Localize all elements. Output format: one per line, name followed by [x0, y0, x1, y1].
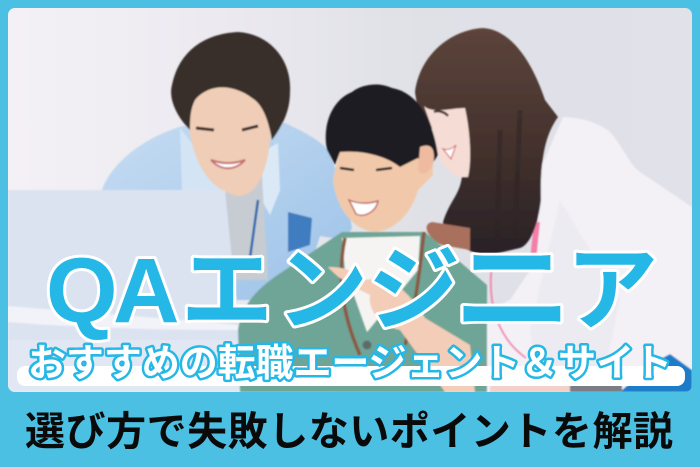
person: man on the left in a blue shirt	[102, 32, 352, 300]
heading: QAエンジニア: ア	[566, 240, 658, 342]
laptop	[8, 190, 240, 392]
white strip behind subtitle	[17, 366, 685, 386]
bottom caption: 選び方で失敗しないポイントを解説: 選び方で失敗しないポイントを解説	[25, 410, 673, 454]
person: woman on the right in a white blouse	[415, 28, 692, 392]
heading: QAエンジニア: ニ	[453, 232, 573, 347]
subheading: おすすめの転職エージェント＆サイト: おすすめの転職エージェント＆サイト	[28, 343, 672, 385]
heading: QAエンジニア: QAエンジ	[46, 240, 460, 342]
person: man in the middle in a green cardigan	[238, 85, 487, 392]
heading: QAエンジニア	[46, 232, 658, 347]
